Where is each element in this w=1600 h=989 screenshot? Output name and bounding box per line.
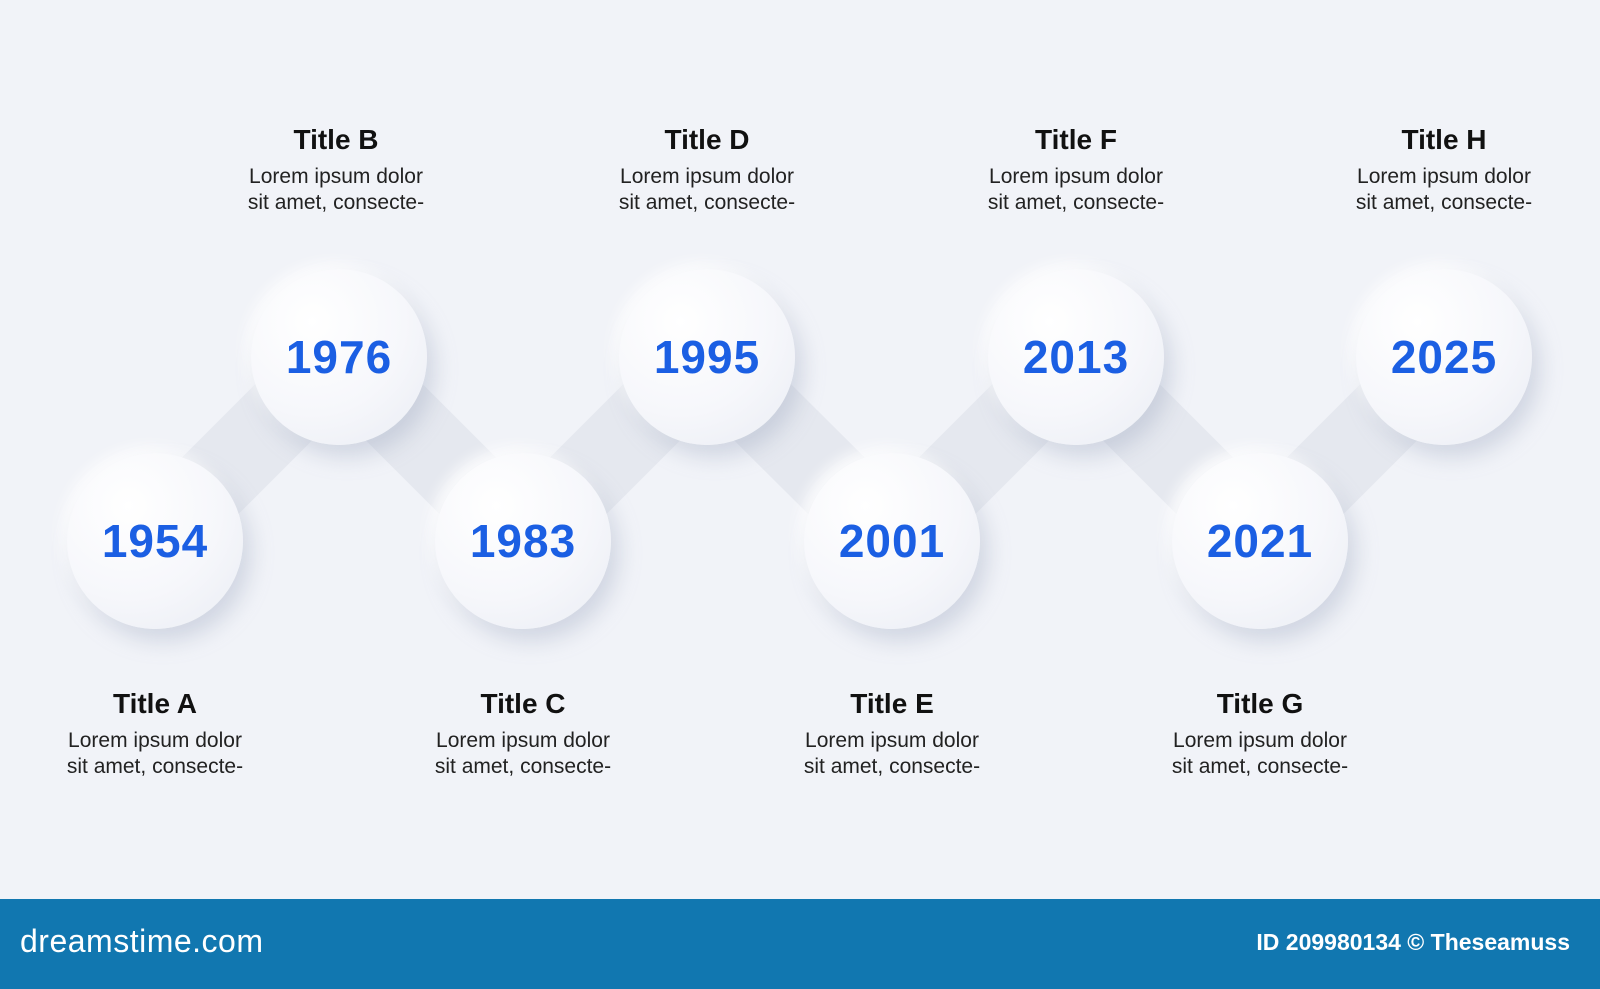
text: Title B xyxy=(248,124,424,214)
text: Title G: Title G xyxy=(1217,688,1303,719)
text: Title B: Lorem ipsum dolor xyxy=(249,165,423,188)
circle 1954: 1954 xyxy=(102,515,208,567)
text: Title F xyxy=(988,124,1164,214)
text: Title G: Lorem ipsum dolor xyxy=(1173,729,1347,752)
circle 2001: 2001 xyxy=(839,515,945,567)
text: Title G: sit amet, consecte- xyxy=(1172,755,1348,778)
text: Title C xyxy=(435,688,611,778)
text: Title D: Lorem ipsum dolor xyxy=(620,165,794,188)
circle 2025: 2025 xyxy=(1391,331,1497,383)
text: Title D xyxy=(619,124,795,214)
text: Title E: Lorem ipsum dolor xyxy=(805,729,979,752)
circle 2021: 2021 xyxy=(1207,515,1313,567)
text: Title E: sit amet, consecte- xyxy=(804,755,980,778)
text: Title H xyxy=(1356,124,1532,214)
text: Title H: Lorem ipsum dolor xyxy=(1357,165,1531,188)
text: Title C: sit amet, consecte- xyxy=(435,755,611,778)
circle 1995: 1995 xyxy=(654,331,760,383)
text: Title A: Title A xyxy=(113,688,197,719)
text: Title C: Lorem ipsum dolor xyxy=(436,729,610,752)
circle 2013: 2013 xyxy=(1023,331,1129,383)
circle 1976: 1976 xyxy=(286,331,392,383)
circle 2001 xyxy=(804,453,980,629)
text: Title F: sit amet, consecte- xyxy=(988,191,1164,214)
text: Title C: Title C xyxy=(480,688,566,719)
text: Title H: sit amet, consecte- xyxy=(1356,191,1532,214)
text: Title D: Title D xyxy=(664,124,750,155)
circle 1983: 1983 xyxy=(470,515,576,567)
footer xyxy=(0,899,1600,989)
text: Title E: Title E xyxy=(850,688,934,719)
text: Title D: sit amet, consecte- xyxy=(619,191,795,214)
text: Title F: Title F xyxy=(1035,124,1117,155)
text: Title A: sit amet, consecte- xyxy=(67,755,243,778)
text: Title H: Title H xyxy=(1401,124,1487,155)
text: Title B: Title B xyxy=(293,124,379,155)
text: Title B: sit amet, consecte- xyxy=(248,191,424,214)
circle 2025 xyxy=(1356,269,1532,445)
circle 1983 xyxy=(435,453,611,629)
circle 1954 xyxy=(67,453,243,629)
circle 1976 xyxy=(251,269,427,445)
circle 2021 xyxy=(1172,453,1348,629)
text: Title A: Lorem ipsum dolor xyxy=(68,729,242,752)
footer id: ID 209980134 © Theseamuss xyxy=(1256,929,1570,955)
text: Title E xyxy=(804,688,980,778)
circle 2013 xyxy=(988,269,1164,445)
circle 1995 xyxy=(619,269,795,445)
text: Title F: Lorem ipsum dolor xyxy=(989,165,1163,188)
footer logo: dreamstime.com xyxy=(20,923,264,959)
text: Title A xyxy=(67,688,243,778)
text: Title G xyxy=(1172,688,1348,778)
